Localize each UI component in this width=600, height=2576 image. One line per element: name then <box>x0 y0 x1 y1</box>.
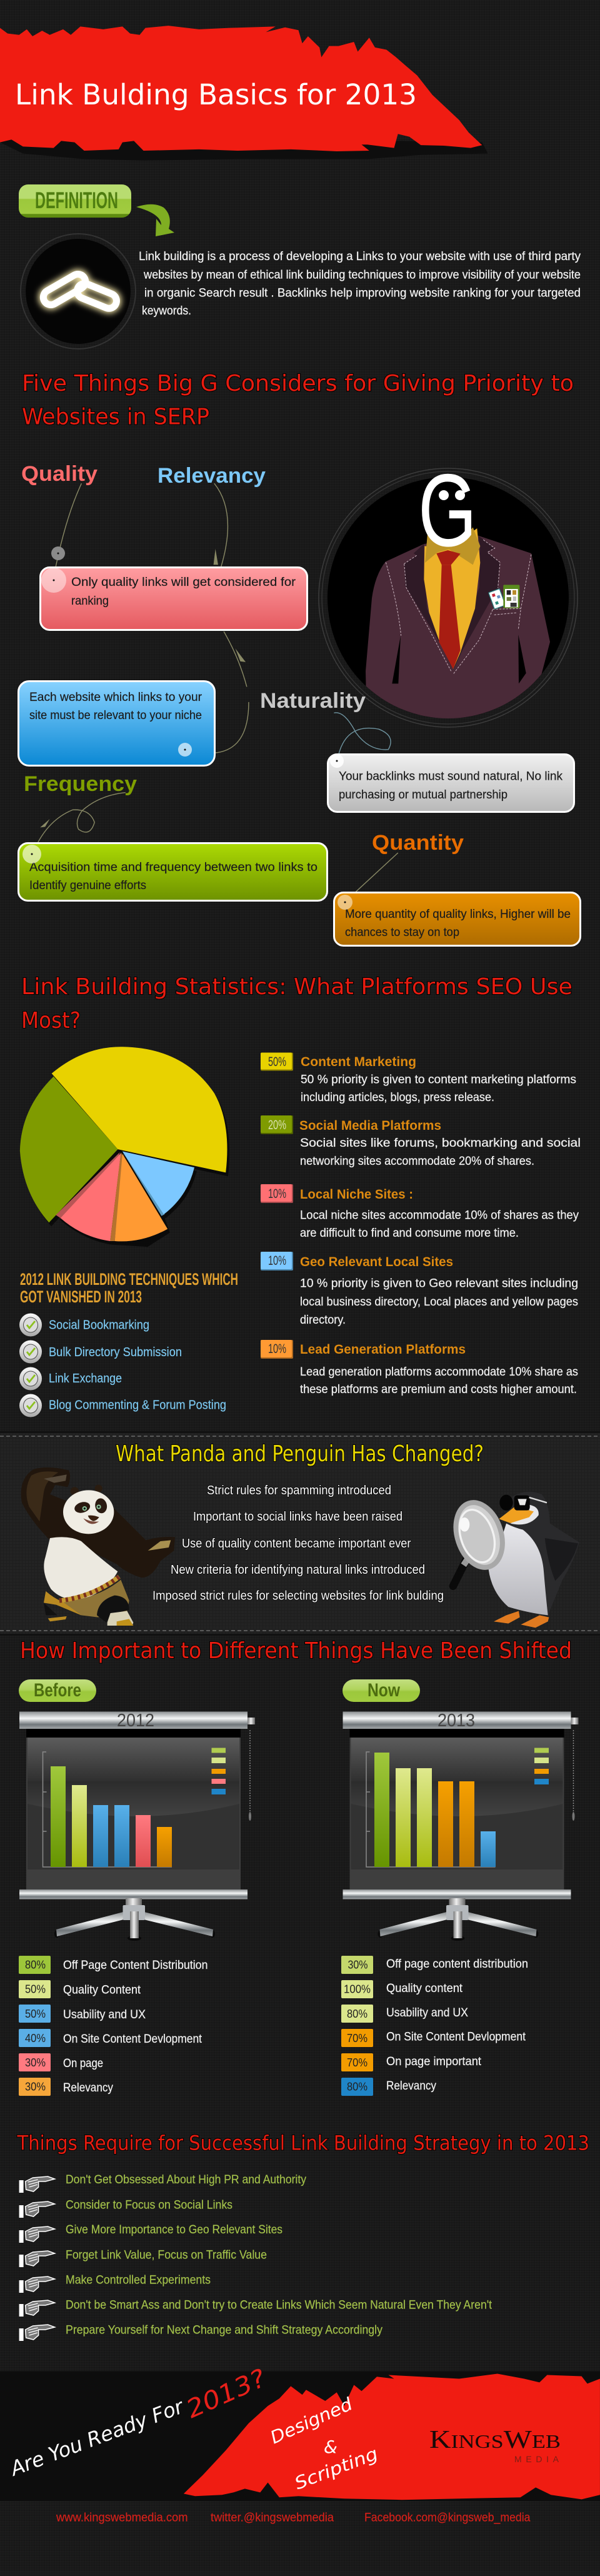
legend: now values: Off page content distribution <box>386 1957 528 1971</box>
legend: now values: Quality content <box>386 1981 463 1995</box>
icon: green curved arrow <box>136 204 174 236</box>
bar chart: 2012: 2012 <box>117 1711 154 1731</box>
legend: content marketing: 50 % priority is given to content marketing platforms <box>301 1072 576 1086</box>
legend: geo relevant <box>261 1252 578 1327</box>
legend: local niche <box>261 1184 579 1240</box>
KingsWeb Media logo: KINGS WEB <box>429 2425 561 2453</box>
legend: now values: 30% <box>348 1958 368 1971</box>
illustration: G character in suit <box>319 453 578 727</box>
definition badge: DEFINITION <box>35 188 118 213</box>
callout: quantity: More quantity of quality links, Higher will be <box>345 908 571 921</box>
bar chart: 2012 <box>19 1711 255 1941</box>
changes list: Important to social links have been raised <box>193 1510 402 1524</box>
checklist: Social Bookmarking <box>49 1318 149 1332</box>
label: Quality: Quality <box>21 462 98 486</box>
heading: five things: Five Things Big G Considers for Giving Priority to <box>22 371 574 396</box>
checklist: Bulk Directory Submission <box>49 1345 182 1359</box>
definition paragraph: keywords. <box>142 304 191 318</box>
legend: now values: On Site Content Devlopment <box>386 2030 526 2043</box>
definition paragraph: websites by mean of ethical link building techniques to improve visibility of your website <box>143 268 581 281</box>
before badge: Before <box>34 1680 81 1701</box>
legend: before values: On Site Content Devlopment <box>63 2032 202 2046</box>
strategy tips list <box>19 2173 492 2341</box>
legend: social media: Social sites like forums, bookmarking and social <box>300 1136 581 1150</box>
callout: quantity: chances to stay on top <box>345 926 459 939</box>
legend: now values: 70% <box>347 2032 368 2045</box>
legend: content marketing: including articles, blogs, press release. <box>301 1090 494 1104</box>
legend: social media <box>261 1115 581 1168</box>
bar chart: 2013 <box>342 1711 579 1941</box>
illustration: penguin <box>448 1492 579 1628</box>
callout: frequency <box>19 843 328 900</box>
legend: before values: 30% <box>25 2056 46 2069</box>
legend: content marketing <box>261 1053 576 1104</box>
heading: statistics: Link Building Statistics: What Platforms SEO Use <box>21 974 572 1000</box>
callout: naturality: purchasing or mutual partnership <box>339 788 508 802</box>
illustration: panda <box>21 1467 175 1626</box>
strategy tips list: Don't be Smart Ass and Don't try to Create Links Which Seem Natural Even They Aren't <box>66 2298 492 2312</box>
legend: now values: 80% <box>347 2008 368 2020</box>
strategy tips list: Prepare Yourself for Next Change and Shift Strategy Accordingly <box>66 2323 382 2337</box>
footer links <box>56 2511 531 2525</box>
heading: vanished techniques <box>20 1270 238 1306</box>
legend: geo relevant: Geo Relevant Local Sites <box>300 1255 453 1269</box>
label: Quantity: Quantity <box>372 831 464 855</box>
heading: five things <box>22 371 574 430</box>
callout: frequency: Identify genuine efforts <box>29 879 146 892</box>
checklist: Link Exchange <box>49 1371 122 1386</box>
legend: local niche: 10% <box>268 1187 286 1201</box>
callout: relevancy: site must be relevant to your niche <box>29 709 202 722</box>
legend: social media: networking sites accommodate 20% of shares. <box>300 1154 534 1168</box>
callout: frequency: Acquisition time and frequency between two links to <box>29 861 318 874</box>
strategy tips list: Make Controlled Experiments <box>66 2273 211 2287</box>
label: Frequency: Frequency <box>24 772 137 796</box>
legend: before values: 50% <box>25 2008 46 2020</box>
legend: before values: Usability and UX <box>63 2008 146 2021</box>
legend: geo relevant: directory. <box>300 1313 346 1327</box>
legend: before values <box>19 1956 208 2096</box>
legend: before values: 30% <box>25 2081 46 2093</box>
legend: lead generation: Lead generation platforms accommodate 10% share as <box>300 1365 578 1379</box>
strategy tips list: Give More Importance to Geo Relevant Sites <box>66 2223 282 2236</box>
legend: local niche: are difficult to find and consume more time. <box>300 1226 519 1240</box>
definition paragraph: in organic Search result . Backlinks help improving website ranking for your targeted <box>144 286 581 300</box>
KingsWeb Media logo: MEDIA <box>514 2454 559 2464</box>
heading: how important: How Important to Different Things Have Been Shifted <box>20 1638 572 1664</box>
changes list: Imposed strict rules for selecting websites for link bulding <box>152 1589 444 1603</box>
heading: five things: Websites in SERP <box>22 404 209 430</box>
now badge <box>342 1679 420 1702</box>
designed and scripting text <box>267 2393 381 2494</box>
are you ready text: Are You Ready For <box>6 2394 188 2481</box>
legend: now values: 70% <box>347 2056 368 2069</box>
legend: before values: 50% <box>25 1983 46 1996</box>
callout: relevancy: Each website which links to your <box>29 691 202 704</box>
designed and scripting text: Scripting <box>292 2443 381 2494</box>
changes list: Strict rules for spamming introduced <box>207 1484 391 1497</box>
callout: quality: ranking <box>71 595 109 608</box>
designed and scripting text: Designed <box>267 2393 356 2448</box>
designed and scripting text: & <box>324 2437 338 2457</box>
legend: before values: On page <box>63 2056 103 2070</box>
strategy tips list: Don't Get Obsessed About High PR and Authority <box>66 2173 306 2186</box>
legend: before values: Off Page Content Distribution <box>63 1958 208 1972</box>
2013 text: 2013? <box>182 2364 270 2424</box>
footer links: www.kingswebmedia.com <box>56 2511 188 2525</box>
icon: glowing chain links in circle <box>21 234 136 349</box>
callout: quality: Only quality links will get considered for <box>71 576 296 589</box>
strategy tips list: Forget Link Value, Focus on Traffic Value <box>66 2248 267 2262</box>
definition paragraph: Link building is a process of developing a Links to your website with use of third party <box>139 249 581 263</box>
callout: naturality: Your backlinks must sound natural, No link <box>339 770 562 783</box>
changes list: Use of quality content became important ever <box>182 1537 411 1551</box>
footer links: twitter.@kingswebmedia <box>211 2511 334 2525</box>
heading: vanished techniques: 2012 LINK BUILDING TECHNIQUES WHICH <box>20 1270 238 1289</box>
callout: relevancy <box>19 682 215 765</box>
label: Relevancy: Relevancy <box>158 464 266 488</box>
legend: lead generation <box>261 1340 578 1396</box>
title banner <box>0 26 488 161</box>
legend: lead generation: Lead Generation Platforms <box>300 1342 466 1357</box>
heading: statistics: Most? <box>21 1008 81 1034</box>
connector curves and pins <box>32 483 398 902</box>
definition paragraph <box>139 249 581 318</box>
footer links: Facebook.com@kingsweb_media <box>364 2511 531 2525</box>
legend: geo relevant: 10% <box>268 1254 286 1268</box>
legend: now values: 100% <box>344 1983 371 1996</box>
strategy tips list: Consider to Focus on Social Links <box>66 2198 232 2211</box>
panel heading: What Panda and Penguin Has Changed? <box>116 1441 484 1467</box>
legend: local niche: Local Niche Sites : <box>300 1187 413 1202</box>
legend: lead generation: these platforms are premium and costs higher amount. <box>300 1382 577 1396</box>
now badge: Now <box>368 1680 401 1701</box>
legend: geo relevant: local business directory, Local places and yellow pages <box>300 1295 578 1309</box>
panel: panda and penguin <box>0 1431 600 1636</box>
legend: geo relevant: 10 % priority is given to Geo relevant sites including <box>300 1277 578 1291</box>
title: Link Bulding Basics for 2013 <box>15 78 417 111</box>
legend: content marketing: Content Marketing <box>301 1055 416 1069</box>
G letter head: G <box>418 453 477 568</box>
legend: before values: 40% <box>25 2032 46 2045</box>
checklist: Blog Commenting & Forum Posting <box>49 1398 226 1412</box>
legend: before values: Quality Content <box>63 1983 141 1997</box>
legend: now values: Relevancy <box>386 2079 436 2093</box>
legend: local niche: Local niche sites accommodate 10% of shares as they <box>300 1209 579 1222</box>
callout: naturality <box>328 754 574 812</box>
legend: lead generation: 10% <box>268 1342 286 1356</box>
heading: vanished techniques: GOT VANISHED IN 2013 <box>20 1287 142 1306</box>
legend: before values: 80% <box>25 1958 46 1971</box>
changes list: New criteria for identifying natural links introduced <box>171 1563 425 1577</box>
callout: quantity <box>334 893 580 945</box>
legend: now values <box>341 1956 528 2096</box>
legend: now values: Usability and UX <box>386 2006 468 2020</box>
checklist <box>19 1313 226 1417</box>
footer banner <box>0 2364 600 2501</box>
pie chart <box>20 1047 229 1247</box>
legend: social media: 20% <box>268 1118 286 1132</box>
heading: strategy: Things Require for Successful Link Building Strategy in to 2013 <box>16 2131 589 2155</box>
label: Naturality: Naturality <box>260 689 366 713</box>
legend: now values: 80% <box>347 2081 368 2093</box>
definition badge <box>19 184 131 218</box>
legend: social media: Social Media Platforms <box>299 1119 441 1133</box>
callout: quality <box>40 546 308 630</box>
legend: content marketing: 50% <box>268 1055 286 1069</box>
legend: now values: On page important <box>386 2055 482 2068</box>
bar chart: 2013: 2013 <box>438 1711 475 1731</box>
changes list <box>152 1484 444 1603</box>
heading: statistics <box>21 974 572 1034</box>
legend: before values: Relevancy <box>63 2081 113 2095</box>
